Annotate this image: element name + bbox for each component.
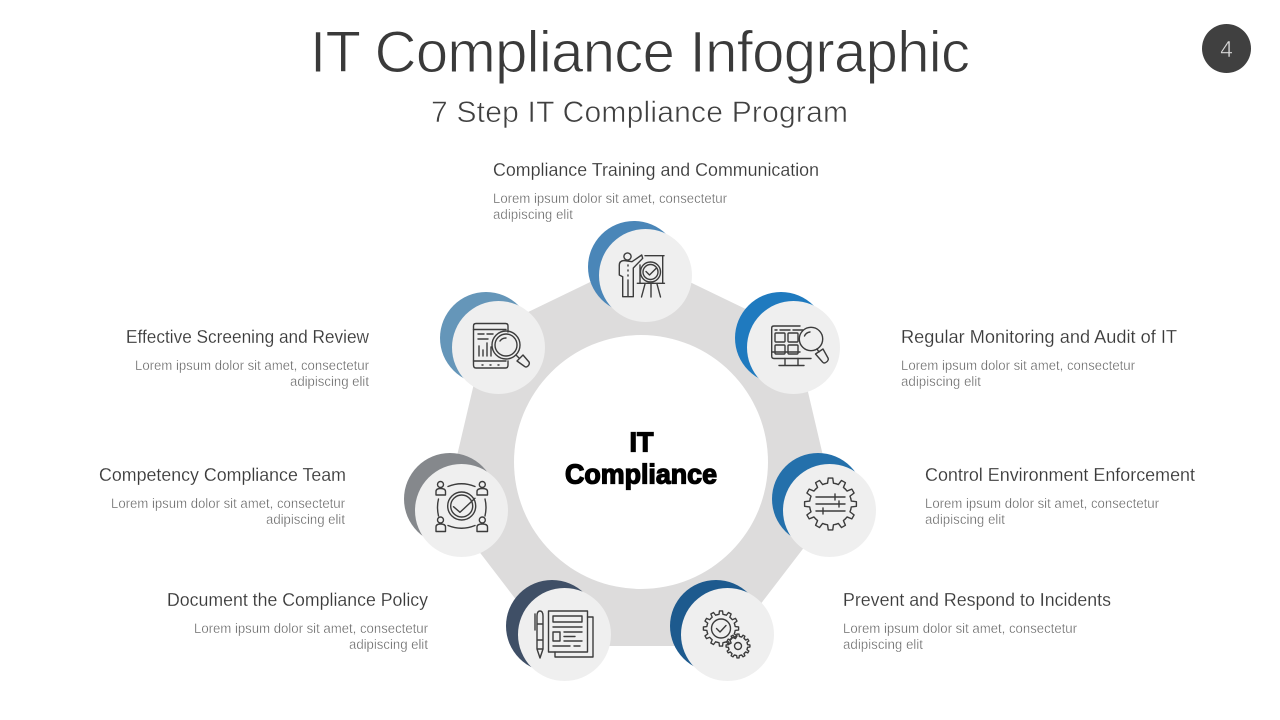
accent circle <box>506 580 598 672</box>
accent circle <box>440 292 532 384</box>
step: Prevent and Respond to Incidents <box>670 580 1111 681</box>
description <box>843 621 1077 652</box>
heading: Effective Screening and Review <box>126 326 370 347</box>
accent circle <box>772 453 864 545</box>
step: Competency Compliance Team <box>99 453 508 557</box>
description: adipiscing elit <box>925 512 1005 527</box>
heptagon ring <box>445 258 835 646</box>
icon disc <box>783 464 876 557</box>
icon: presenter with board <box>619 253 664 297</box>
page number badge: 4 <box>1220 36 1233 62</box>
icon disc <box>518 588 611 681</box>
icon disc <box>681 588 774 681</box>
description: adipiscing elit <box>493 207 573 222</box>
accent circle <box>670 580 762 672</box>
description: adipiscing elit <box>266 512 345 527</box>
icon: gears with check <box>703 611 750 658</box>
centre label <box>565 426 717 490</box>
icon: gear with sliders <box>805 478 856 530</box>
description: adipiscing elit <box>843 637 923 652</box>
icon disc <box>452 301 545 394</box>
description <box>135 358 369 389</box>
description: Lorem ipsum dolor sit amet, consectetur <box>493 191 727 206</box>
description: Lorem ipsum dolor sit amet, consectetur <box>901 358 1135 373</box>
icon: pen and document <box>535 611 593 658</box>
description: adipiscing elit <box>349 637 428 652</box>
page number badge <box>1202 24 1251 73</box>
step: Control Environment Enforcement <box>772 453 1195 557</box>
description <box>111 496 345 527</box>
description <box>194 621 428 652</box>
description: Lorem ipsum dolor sit amet, consectetur <box>111 496 345 511</box>
description: Lorem ipsum dolor sit amet, consectetur <box>135 358 369 373</box>
accent circle <box>735 292 827 384</box>
centre label: Compliance <box>565 458 717 490</box>
heading: Competency Compliance Team <box>99 464 346 485</box>
description: adipiscing elit <box>901 374 981 389</box>
heading: Regular Monitoring and Audit of IT <box>901 326 1177 347</box>
step: Document the Compliance Policy <box>167 580 611 681</box>
heading: Document the Compliance Policy <box>167 589 429 610</box>
description <box>901 358 1135 389</box>
icon: team around check <box>436 482 488 532</box>
heading: Control Environment Enforcement <box>925 464 1195 485</box>
description: Lorem ipsum dolor sit amet, consectetur <box>194 621 428 636</box>
title: IT Compliance Infographic <box>310 20 970 85</box>
icon disc <box>415 464 508 557</box>
icon: monitor with magnifier <box>772 326 828 366</box>
subtitle: 7 Step IT Compliance Program <box>431 96 848 129</box>
heading: Prevent and Respond to Incidents <box>843 589 1111 610</box>
description: Lorem ipsum dolor sit amet, consectetur <box>925 496 1159 511</box>
accent circle <box>404 453 496 545</box>
icon disc <box>599 229 692 322</box>
centre circle <box>514 335 768 589</box>
centre label: IT <box>630 426 654 458</box>
step: Compliance Training and Communication <box>493 159 819 322</box>
icon disc <box>747 301 840 394</box>
accent circle <box>588 221 680 313</box>
description: adipiscing elit <box>290 374 369 389</box>
description <box>925 496 1159 527</box>
description <box>493 191 727 222</box>
heading: Compliance Training and Communication <box>493 159 819 180</box>
step: Effective Screening and Review <box>126 292 545 394</box>
step: Regular Monitoring and Audit of IT <box>735 292 1177 394</box>
icon: tablet with magnifier <box>474 324 529 368</box>
description: Lorem ipsum dolor sit amet, consectetur <box>843 621 1077 636</box>
